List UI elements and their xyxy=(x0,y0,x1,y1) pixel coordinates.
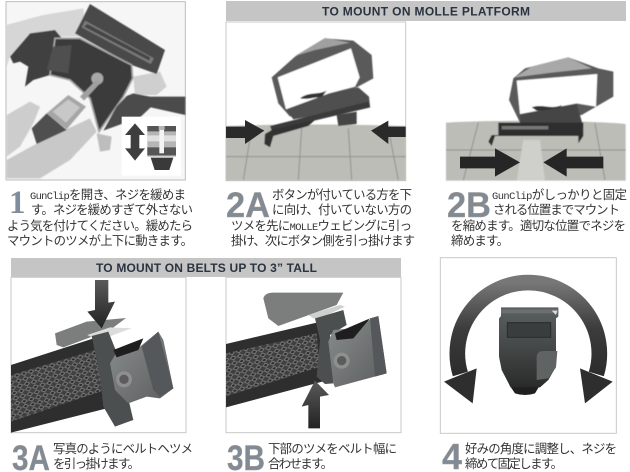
step number 1: 1 xyxy=(9,185,26,221)
panel: step 4 xyxy=(440,258,617,472)
arrow: right xyxy=(543,148,603,177)
panel: step 3B xyxy=(226,277,401,472)
photo: hands loosening the screw with a driver xyxy=(6,2,185,180)
step 2B text: 締めます。 xyxy=(451,234,509,248)
step 1 text: マウントのツメが上下に動きます。 xyxy=(7,233,193,248)
arrow: up xyxy=(302,381,329,428)
photo: lower claw fitted to belt width xyxy=(226,277,401,433)
arrow: down xyxy=(87,280,115,328)
step 3A text: 写真のようにベルトヘツメ xyxy=(53,442,193,456)
step 2A text: ボタンが付いている方を下 xyxy=(272,187,412,202)
step 4 text xyxy=(465,441,617,471)
heading: belts: TO MOUNT ON BELTS UP TO 3” TALL xyxy=(96,261,317,275)
step 2A text: 掛け、次にボタン側を引っ掛けます xyxy=(231,233,415,248)
step number 2B: 2B xyxy=(447,186,491,225)
step number 2A: 2A xyxy=(226,186,270,225)
arrow: left xyxy=(226,120,264,144)
step 1 text: GunClipを開き、ネジを緩めま xyxy=(30,188,186,203)
arrow: left xyxy=(460,148,520,177)
inset: adjustment arrow and mount claw xyxy=(122,117,181,176)
step 3B text: 下部のツメをベルト幅に xyxy=(268,441,397,456)
panel: step 2B xyxy=(446,22,627,248)
step 2B text: される位置までマウント xyxy=(493,203,620,217)
step 1 text: す。ネジを緩めすぎて外さない xyxy=(31,203,193,217)
panel: step 3A xyxy=(11,277,193,472)
photo: clip tightened on molle webbing xyxy=(446,22,626,181)
step 2A text: ツメを先にMOLLEウェビングに引っ xyxy=(231,219,412,234)
heading: molle platform xyxy=(226,1,626,21)
step 2B text: GunClipがしっかりと固定 xyxy=(492,187,627,203)
step 2B text: を縮めます。適切な位置でネジを xyxy=(451,218,626,233)
heading: molle platform: TO MOUNT ON MOLLE PLATFORM xyxy=(322,4,530,18)
arrow: right xyxy=(371,121,406,144)
step 1 text xyxy=(7,188,193,248)
photo: clip tilted onto molle webbing xyxy=(226,22,406,181)
step 3A text xyxy=(53,442,193,471)
step 2B text xyxy=(451,187,627,248)
step 3B text: 合わせます。 xyxy=(268,457,333,471)
step 4 text: 好みの角度に調整し、ネジを xyxy=(465,441,617,456)
step 2A text: に向け、付いていない方の xyxy=(272,202,412,217)
step 3A text: を引っ掛けます。 xyxy=(53,456,140,471)
panel: step 2A xyxy=(226,22,415,248)
heading: belts xyxy=(11,258,401,277)
icon: mount seen from the back xyxy=(499,307,558,395)
panel: step 1 xyxy=(6,2,193,248)
step 3B text xyxy=(268,441,397,471)
step 2A text xyxy=(231,187,415,248)
arrow: rotation arc with two heads xyxy=(444,283,613,403)
photo: clip hooked over a belt from above xyxy=(11,277,186,433)
step 1 text: よう気を付けてください。緩めたら xyxy=(7,218,193,233)
step 4 text: 締めて固定します。 xyxy=(465,457,563,471)
